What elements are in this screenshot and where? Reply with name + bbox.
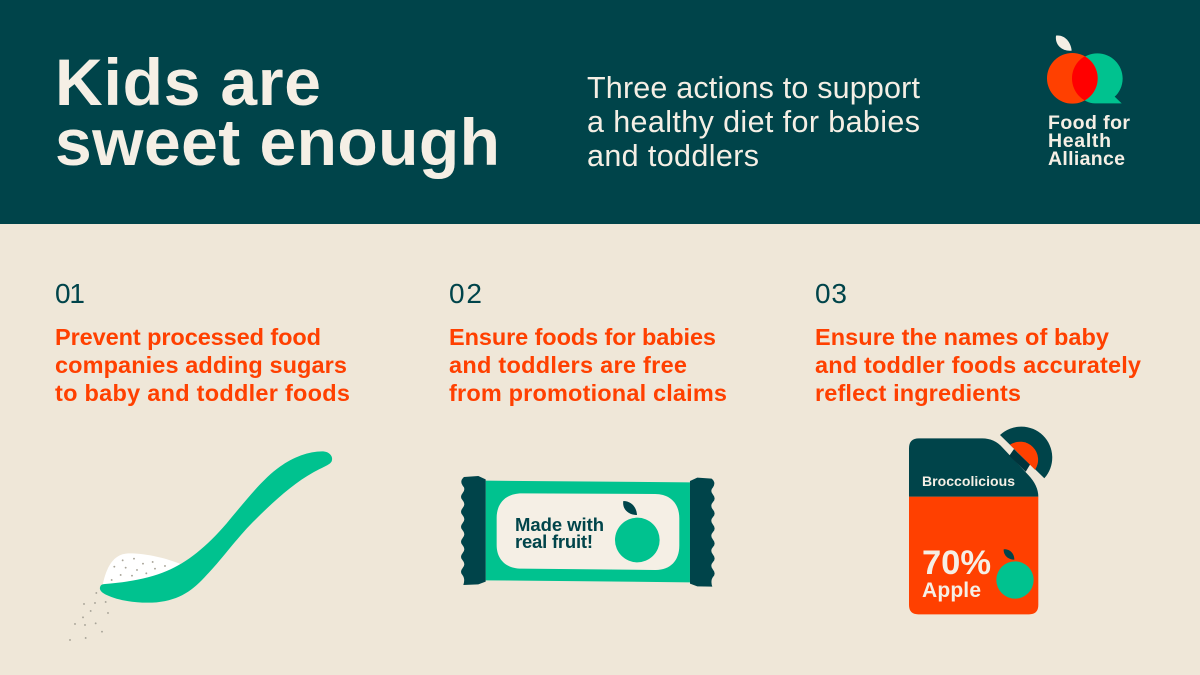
heading: action 01: to baby and toddler foods [55, 380, 350, 406]
icon: logo apple and speech bubble [1047, 35, 1123, 104]
heading: action 02 [449, 324, 727, 406]
title [55, 45, 500, 179]
pouch ingredient label: Apple [922, 579, 981, 602]
heading: action 03: reflect ingredients [815, 380, 1021, 406]
panel: header band [0, 0, 1200, 224]
heading: action 02: from promotional claims [449, 380, 727, 406]
title: Kids are [55, 45, 321, 119]
heading: action 02: and toddlers are free [449, 352, 687, 378]
subtitle [587, 71, 921, 173]
title: sweet enough [55, 105, 500, 179]
logo wordmark: Food for [1048, 112, 1130, 134]
number 03: 03 [815, 278, 847, 309]
subtitle: a healthy diet for babies [587, 105, 920, 139]
heading: action 01 [55, 324, 350, 406]
number 02: 02 [449, 278, 482, 309]
heading: action 03: and toddler foods accurately [815, 352, 1141, 378]
pouch percentage label: 70% [922, 544, 991, 582]
wrapper label text: Made with [515, 514, 604, 535]
panel: action 02 [449, 278, 727, 587]
wrapper label text [515, 514, 604, 552]
logo wordmark: Health [1048, 130, 1111, 152]
panel: action 03 [815, 278, 1141, 614]
heading: action 02: Ensure foods for babies [449, 324, 716, 350]
pouch cap [1000, 427, 1052, 478]
logo wordmark: Alliance [1048, 148, 1125, 170]
heading: action 01: companies adding sugars [55, 352, 347, 378]
subtitle: and toddlers [587, 139, 759, 173]
heading: action 01: Prevent processed food [55, 324, 321, 350]
pouch product name: Broccolicious [922, 473, 1015, 489]
logo wordmark [1048, 112, 1130, 170]
panel: action 01 [55, 278, 350, 641]
number 01: 01 [55, 278, 85, 309]
heading: action 03: Ensure the names of baby [815, 324, 1109, 350]
logo: Food for Health Alliance [1047, 35, 1130, 170]
wrapper label text: real fruit! [515, 531, 593, 552]
icon: snack bar wrapper [461, 476, 715, 587]
subtitle: Three actions to support [587, 71, 921, 105]
icon: food pouch [909, 427, 1052, 614]
heading: action 03 [815, 324, 1141, 406]
icon: spoon of sugar [69, 451, 332, 641]
